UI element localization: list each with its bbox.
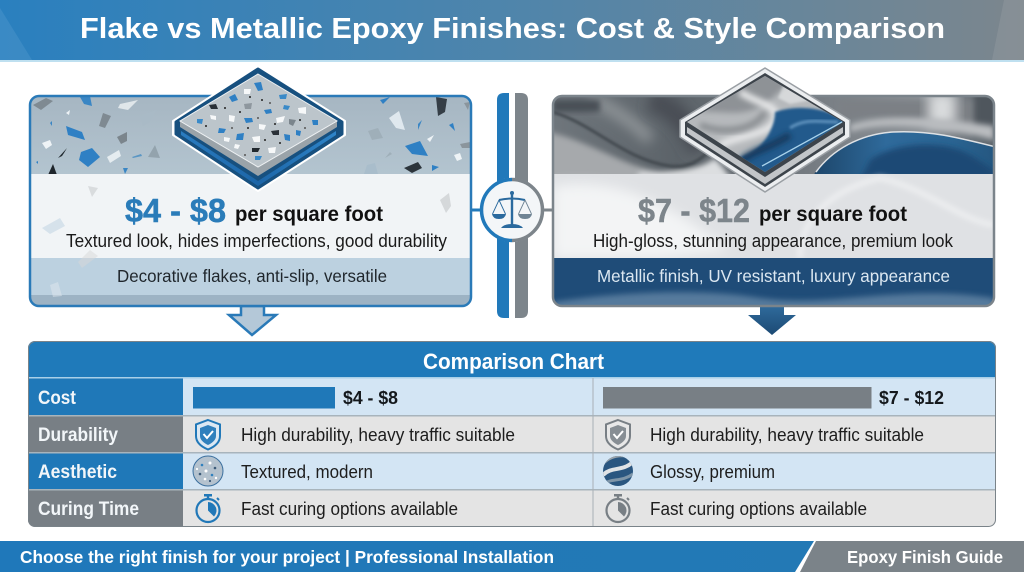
aesthetic text: flake: Textured, modern bbox=[241, 462, 373, 482]
aesthetic text: metallic: Glossy, premium bbox=[650, 462, 775, 482]
icon: shield metallic bbox=[606, 420, 630, 450]
description band: silver bbox=[553, 174, 994, 258]
arrow: metallic card to chart bbox=[748, 306, 796, 335]
flake description: Textured look, hides imperfections, good durability bbox=[66, 230, 448, 251]
icon: textured swatch bbox=[193, 456, 223, 486]
icon: metallic epoxy sample tile bbox=[680, 68, 850, 192]
cost value: metallic: $7 - $12 bbox=[879, 388, 944, 408]
icon: metallic swatch bbox=[603, 456, 633, 486]
title banner bbox=[0, 0, 1024, 62]
row label: cost: Cost bbox=[38, 388, 77, 409]
price unit: flake: per square foot bbox=[235, 203, 383, 226]
price: metallic: $7 - $12 bbox=[638, 192, 750, 229]
panel: metallic finish bbox=[540, 92, 1000, 310]
curing text: flake: Fast curing options available bbox=[241, 499, 458, 519]
row label: curing time: Curing Time bbox=[38, 499, 139, 520]
cost value: flake: $4 - $8 bbox=[343, 388, 398, 408]
description band: pale blue bbox=[32, 276, 470, 295]
footer label: Epoxy Finish Guide bbox=[847, 547, 1003, 567]
flake features: Decorative flakes, anti-slip, versatile bbox=[117, 266, 387, 286]
icon: balance scale bbox=[492, 191, 532, 228]
durability text: metallic: High durability, heavy traffic suitable bbox=[650, 425, 924, 445]
footer message: Choose the right finish for your project | Professional Installation bbox=[20, 547, 554, 567]
title: Flake vs Metallic Epoxy Finishes: Cost & Style Comparison bbox=[80, 13, 945, 45]
divider with scale icon bbox=[472, 93, 552, 318]
icon: flake epoxy sample tile bbox=[173, 66, 345, 191]
durability text: flake: High durability, heavy traffic suitable bbox=[241, 425, 515, 445]
chart title: Comparison Chart bbox=[423, 349, 605, 374]
icon: stopwatch metallic bbox=[606, 494, 630, 522]
description band: navy bbox=[553, 258, 994, 306]
metallic swirl background bbox=[554, 97, 993, 174]
flake pattern background bbox=[33, 97, 470, 174]
row label: aesthetic: Aesthetic bbox=[38, 462, 117, 483]
icon: stopwatch flake bbox=[196, 494, 220, 522]
chart header bbox=[28, 341, 996, 378]
row label: durability: Durability bbox=[38, 425, 118, 446]
metallic description: High-gloss, stunning appearance, premium look bbox=[593, 230, 954, 251]
panel: flake finish bbox=[30, 96, 471, 307]
cost bar: metallic bbox=[603, 387, 872, 408]
cost bar: flake bbox=[193, 387, 335, 408]
icon: shield flake bbox=[196, 420, 220, 450]
comparison chart bbox=[28, 341, 996, 527]
description band: white bbox=[30, 174, 471, 258]
footer banner bbox=[0, 541, 1024, 572]
price: flake: $4 - $8 bbox=[125, 192, 226, 229]
metallic features: Metallic finish, UV resistant, luxury appearance bbox=[597, 266, 950, 286]
arrow: flake card to chart bbox=[229, 306, 276, 335]
curing text: metallic: Fast curing options available bbox=[650, 499, 867, 519]
price unit: metallic: per square foot bbox=[759, 203, 907, 226]
